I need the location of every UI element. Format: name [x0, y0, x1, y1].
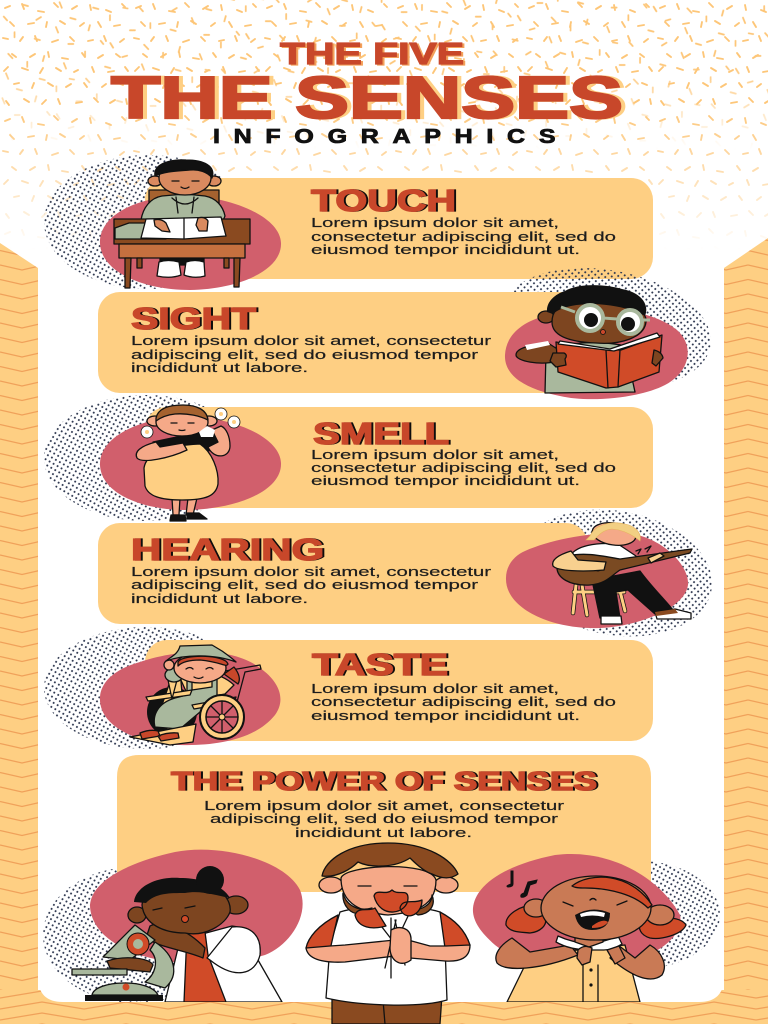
- heading: SMELL: [313, 416, 449, 451]
- body text: eiusmod tempor incididunt ut.: [311, 243, 580, 257]
- body text: adipiscing elit, sed do eiusmod tempor: [131, 578, 479, 592]
- card: [98, 292, 588, 393]
- icon: musician with guitar: [553, 520, 692, 624]
- icon: boy with glasses reading: [516, 285, 663, 393]
- panel: touch: [44, 155, 653, 290]
- body text: consectetur adipiscing elit, sed do: [311, 461, 616, 475]
- pink blob: [100, 196, 281, 290]
- heading: THE POWER OF SENSES: [171, 766, 597, 796]
- halftone blob: [44, 395, 248, 521]
- panel: the power of senses: [43, 755, 720, 1024]
- icon: scientist at microscope: [72, 866, 282, 1002]
- body text: [204, 799, 565, 840]
- body text: [311, 682, 616, 723]
- heading: SIGHT: [131, 301, 256, 336]
- body text: adipiscing elit, sed do eiusmod tempor: [131, 348, 479, 362]
- body text: Lorem ipsum dolor sit amet, consectetur: [204, 799, 565, 813]
- icon: woman smelling flowers: [136, 405, 240, 521]
- pink blob: [100, 417, 281, 510]
- halftone blob: [492, 252, 720, 404]
- icon: child smelling flowers: [306, 843, 470, 1024]
- halftone blob: [508, 495, 722, 651]
- pink blob: [100, 652, 280, 745]
- body text: incididunt ut labore.: [131, 592, 308, 606]
- pink blob: [506, 533, 688, 628]
- title line: the five: THE FIVE: [280, 36, 464, 71]
- pink blob right: [473, 854, 680, 969]
- zigzag frame right: [724, 238, 768, 1024]
- speckled header background: [0, 0, 768, 250]
- card: [98, 523, 588, 624]
- body text: [311, 216, 616, 257]
- halftone blob: [44, 155, 252, 289]
- body text: incididunt ut labore.: [295, 826, 472, 840]
- body text: Lorem ipsum dolor sit amet, consectetur: [131, 334, 492, 348]
- icon: singing child: [496, 871, 686, 1002]
- card: [117, 755, 651, 892]
- heading: TASTE: [312, 647, 448, 682]
- halftone blob right: [560, 861, 720, 969]
- body text: Lorem ipsum dolor sit amet,: [311, 682, 559, 696]
- halftone blob left: [43, 869, 174, 1002]
- body text: Lorem ipsum dolor sit amet, consectetur: [131, 565, 492, 579]
- body text: eiusmod tempor incididunt ut.: [311, 709, 580, 723]
- halftone blob: [44, 627, 248, 749]
- card: [145, 178, 653, 279]
- card: [145, 640, 653, 741]
- body text: [311, 448, 616, 488]
- body text: Lorem ipsum dolor sit amet,: [311, 216, 559, 230]
- pink blob left: [90, 850, 303, 964]
- white content panel: [38, 268, 724, 1002]
- zigzag frame bottom: [0, 990, 768, 1024]
- zigzag frame left: [0, 243, 38, 1024]
- body text: incididunt ut labore.: [131, 361, 308, 375]
- body text: adipiscing elit, sed do eiusmod tempor: [210, 812, 559, 826]
- body text: eiusmod tempor incididunt ut.: [311, 474, 580, 488]
- title line: the senses: THE SENSES: [111, 65, 623, 131]
- heading: TOUCH: [311, 183, 456, 218]
- body text: consectetur adipiscing elit, sed do: [311, 695, 616, 709]
- title: [111, 36, 623, 147]
- panel: smell: [44, 395, 653, 521]
- body text: [131, 565, 492, 606]
- panel: sight: [98, 252, 720, 404]
- card: [145, 407, 653, 508]
- body text: Lorem ipsum dolor sit amet,: [311, 448, 559, 462]
- body text: consectetur adipiscing elit, sed do: [311, 230, 616, 244]
- body text: [131, 334, 492, 375]
- pink blob: [505, 308, 688, 399]
- heading: HEARING: [131, 532, 324, 567]
- panel: taste: [44, 627, 653, 749]
- icon: boy reading at desk: [114, 160, 250, 288]
- panel: hearing: [98, 495, 722, 651]
- subtitle: infographics: INFOGRAPHICS: [213, 125, 556, 147]
- icon: girl in wheelchair with ice cream: [130, 645, 261, 745]
